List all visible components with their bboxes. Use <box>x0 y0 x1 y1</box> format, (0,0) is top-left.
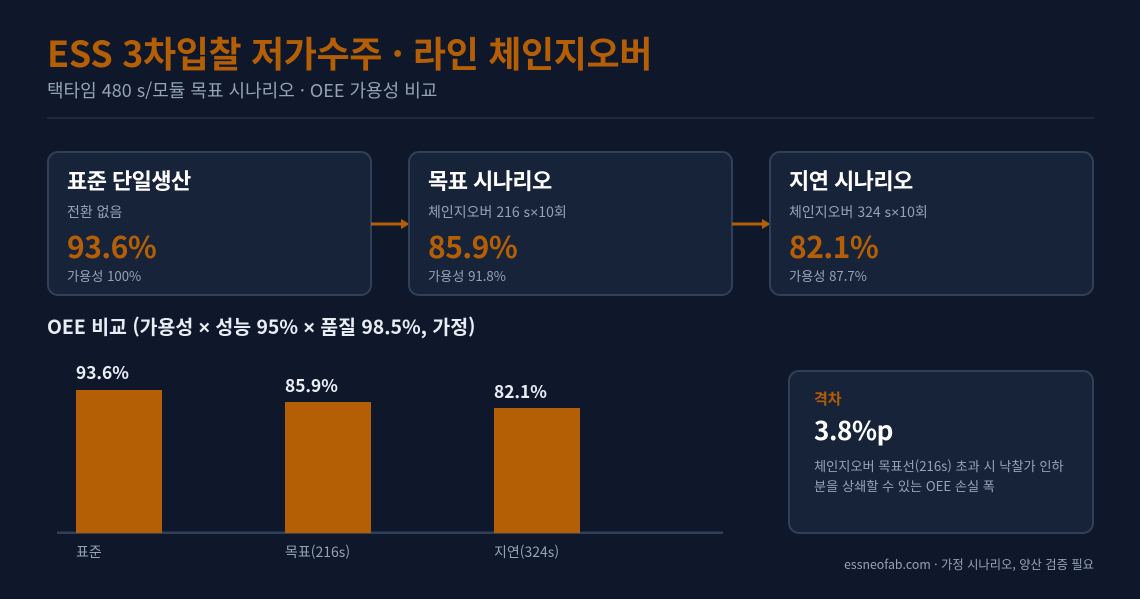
subtitle: 택타임 480 s/모듈 목표 시나리오 · OEE 가용성 비교 <box>47 76 437 102</box>
bar: target: 85.9% <box>285 372 338 397</box>
panel: delayed scenario <box>769 151 1094 296</box>
OEE value: 93.6% <box>67 223 156 267</box>
card description: 체인지오버 324 s×10회 <box>789 202 928 222</box>
bar: delayed <box>494 378 580 562</box>
bar: target: 목표(216s) <box>285 542 350 562</box>
arrow: standard to target <box>371 219 408 229</box>
bar: standard: 93.6% <box>76 359 129 384</box>
chart heading: OEE 비교 (가용성 × 성능 95% × 품질 98.5%, 가정) <box>47 311 475 340</box>
title: ESS 3차입찰 저가수주 · 라인 체인지오버 <box>47 26 652 78</box>
gap description: 체인지오버 목표선(216s) 초과 시 낙찰가 인하 <box>814 456 1064 475</box>
bar: standard <box>76 359 162 562</box>
bar: delayed: 82.1% <box>494 378 547 403</box>
arrow: target to delayed <box>732 219 769 229</box>
OEE value: 85.9% <box>428 223 517 267</box>
availability: 가용성 91.8% <box>428 266 506 285</box>
bar chart <box>57 359 723 562</box>
gap description: 분을 상쇄할 수 있는 OEE 손실 폭 <box>814 476 995 495</box>
panel: gap callout <box>788 370 1094 534</box>
panel: standard single production <box>47 151 372 296</box>
bar: delayed: 지연(324s) <box>494 542 559 562</box>
OEE value: 82.1% <box>789 223 878 267</box>
panel: target scenario <box>408 151 733 296</box>
card description: 전환 없음 <box>67 202 122 222</box>
bar: target <box>285 372 371 562</box>
gap description <box>814 456 1064 495</box>
availability: 가용성 100% <box>67 266 141 285</box>
card description: 체인지오버 216 s×10회 <box>428 202 567 222</box>
gap label: 격차 <box>814 388 842 409</box>
card heading: 목표 시나리오 <box>428 164 552 196</box>
footer source: essneofab.com · 가정 시나리오, 양산 검증 필요 <box>844 555 1094 573</box>
availability: 가용성 87.7% <box>789 266 867 285</box>
card heading: 지연 시나리오 <box>789 164 913 196</box>
card heading: 표준 단일생산 <box>67 164 191 196</box>
gap value: 3.8%p <box>814 411 893 448</box>
bar: standard: 표준 <box>76 542 102 562</box>
